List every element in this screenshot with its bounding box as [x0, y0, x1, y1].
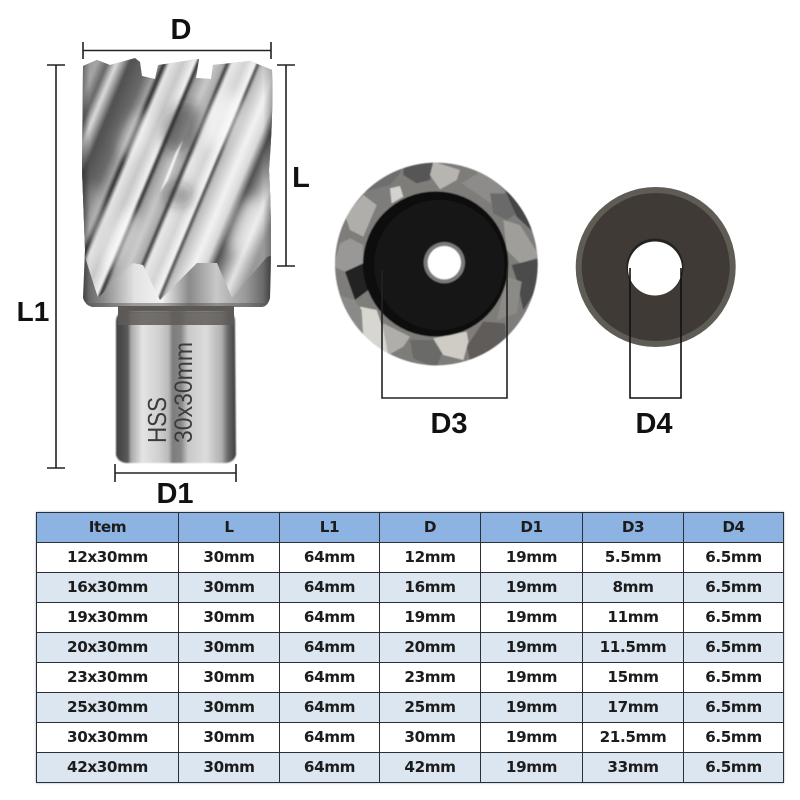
row 12x30mm: 6.5mm	[705, 548, 762, 566]
row 25x30mm: 25x30mm	[67, 698, 148, 716]
row 42x30mm	[37, 753, 783, 782]
row 25x30mm: 17mm	[607, 698, 659, 716]
row 20x30mm	[37, 633, 783, 662]
table header: Item	[89, 518, 126, 536]
row 19x30mm: 30mm	[203, 608, 255, 626]
row 16x30mm: 6.5mm	[705, 578, 762, 596]
row 23x30mm	[67, 668, 762, 686]
row 19x30mm: 11mm	[607, 608, 659, 626]
row 23x30mm: 64mm	[304, 668, 355, 686]
shank	[116, 312, 236, 463]
dimension D1	[115, 464, 236, 510]
row 25x30mm: 19mm	[506, 698, 557, 716]
row 19x30mm: 64mm	[304, 608, 355, 626]
cutter head	[80, 55, 275, 310]
dimension D	[83, 14, 271, 59]
row 42x30mm: 33mm	[607, 758, 659, 776]
row 12x30mm: 12mm	[404, 548, 456, 566]
row 25x30mm: 6.5mm	[705, 698, 762, 716]
specification table	[36, 512, 784, 783]
table header: D4	[722, 518, 745, 536]
row 20x30mm: 11.5mm	[600, 638, 666, 656]
row 12x30mm: 30mm	[203, 548, 255, 566]
row 12x30mm: 12x30mm	[67, 548, 148, 566]
dimension L: L	[292, 162, 310, 194]
row 42x30mm: 64mm	[304, 758, 355, 776]
row 16x30mm: 16mm	[404, 578, 456, 596]
row 23x30mm: 15mm	[607, 668, 659, 686]
engraved text	[142, 342, 198, 443]
table header: L1	[320, 518, 339, 536]
annular cutter side view	[80, 55, 275, 463]
row 12x30mm: 64mm	[304, 548, 355, 566]
cutter shank end view	[576, 187, 736, 347]
row 30x30mm: 64mm	[304, 728, 355, 746]
row 30x30mm: 6.5mm	[705, 728, 762, 746]
table header: D1	[520, 518, 543, 536]
row 42x30mm: 42mm	[404, 758, 456, 776]
row 12x30mm: 5.5mm	[605, 548, 661, 566]
row 20x30mm: 20mm	[404, 638, 456, 656]
row 19x30mm	[67, 608, 762, 626]
row 30x30mm: 30mm	[404, 728, 456, 746]
row 30x30mm: 30x30mm	[67, 728, 148, 746]
row 20x30mm: 20x30mm	[67, 638, 148, 656]
row 25x30mm: 25mm	[404, 698, 456, 716]
row 30x30mm: 19mm	[506, 728, 557, 746]
row 30x30mm: 30mm	[203, 728, 255, 746]
engraved text: HSS	[142, 397, 172, 443]
row 20x30mm: 19mm	[506, 638, 557, 656]
row 16x30mm	[37, 573, 783, 602]
row 42x30mm: 6.5mm	[705, 758, 762, 776]
row 16x30mm: 16x30mm	[67, 578, 148, 596]
row 19x30mm: 19mm	[404, 608, 456, 626]
bracket D4: D4	[635, 408, 673, 440]
row 16x30mm: 8mm	[612, 578, 654, 596]
row 19x30mm: 6.5mm	[705, 608, 762, 626]
row 16x30mm: 30mm	[203, 578, 255, 596]
row 20x30mm: 64mm	[304, 638, 355, 656]
dimension L	[277, 65, 310, 266]
row 19x30mm: 19mm	[506, 608, 557, 626]
table header: D	[424, 518, 436, 536]
row 23x30mm: 6.5mm	[705, 668, 762, 686]
bracket D4	[630, 268, 681, 440]
row 12x30mm	[67, 548, 762, 566]
engraved text: 30x30mm	[170, 342, 198, 443]
row 12x30mm: 19mm	[506, 548, 557, 566]
dimension L1: L1	[17, 296, 49, 327]
row 23x30mm: 23x30mm	[67, 668, 148, 686]
row 30x30mm: 21.5mm	[600, 728, 666, 746]
table header: L	[224, 518, 234, 536]
dimension L1	[17, 65, 65, 468]
row 16x30mm: 64mm	[304, 578, 355, 596]
row 42x30mm: 30mm	[203, 758, 255, 776]
table header: D3	[622, 518, 644, 536]
table header	[37, 513, 783, 782]
row 23x30mm: 19mm	[506, 668, 557, 686]
row 25x30mm: 64mm	[304, 698, 355, 716]
shank neck	[118, 306, 234, 326]
row 20x30mm: 6.5mm	[705, 638, 762, 656]
bracket D3: D3	[430, 408, 468, 440]
row 25x30mm	[37, 693, 783, 722]
row 23x30mm: 30mm	[203, 668, 255, 686]
cutter end view	[333, 162, 540, 368]
row 20x30mm: 30mm	[203, 638, 255, 656]
row 23x30mm: 23mm	[404, 668, 456, 686]
dimension D: D	[171, 14, 191, 46]
row 30x30mm	[67, 728, 762, 746]
row 16x30mm: 19mm	[506, 578, 557, 596]
row 25x30mm: 30mm	[203, 698, 255, 716]
product diagram	[17, 14, 736, 505]
row 42x30mm: 42x30mm	[67, 758, 148, 776]
row 19x30mm: 19x30mm	[67, 608, 148, 626]
row 42x30mm: 19mm	[506, 758, 557, 776]
bracket D3	[382, 270, 507, 440]
